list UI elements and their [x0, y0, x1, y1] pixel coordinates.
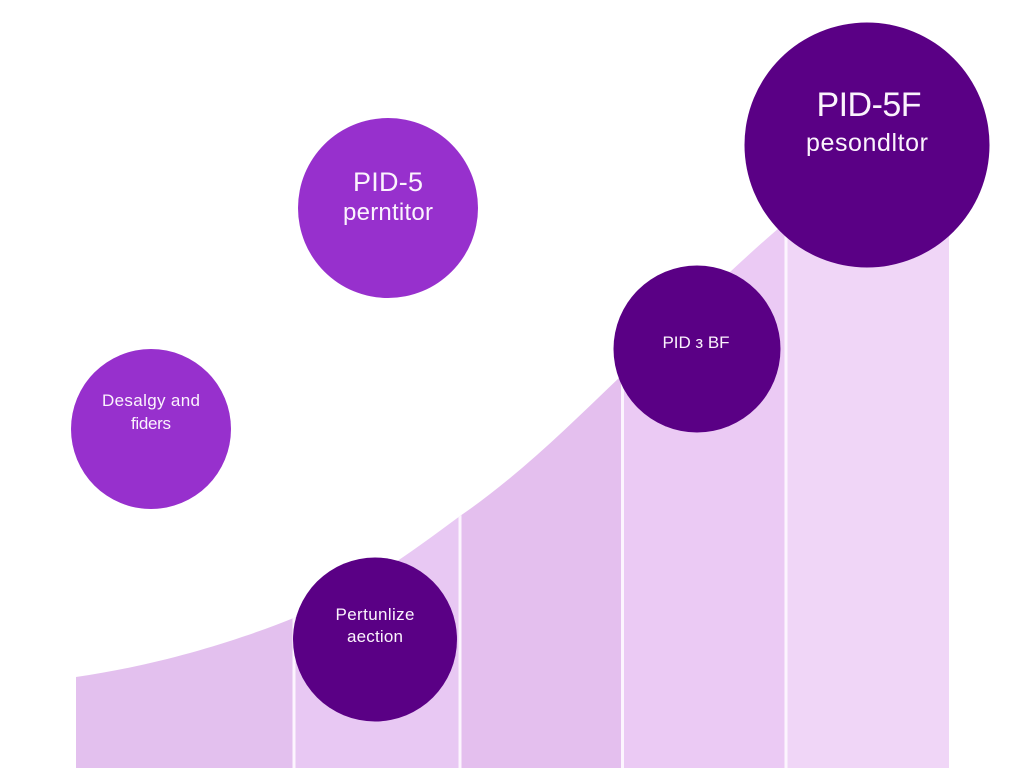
circle: Desalgy and fiders: fiders [131, 414, 171, 433]
column 4 [622, 200, 786, 768]
circle: PID-5F pesondltor [744, 22, 990, 268]
circle: PID 3 BF [614, 266, 780, 432]
circle: Desalgy and fiders [71, 349, 231, 509]
circle: PID-5F pesondltor: PID-5F [816, 86, 922, 124]
circle: PID-5 perntitor: PID-5 [353, 167, 423, 197]
circle: PID-5 perntitor [298, 118, 478, 298]
circle: Pertunlize action [293, 558, 457, 722]
column 5 [786, 200, 949, 768]
column 2 [294, 516, 460, 768]
circle: PID-5 perntitor: perntitor [343, 199, 433, 226]
circle: PID 3 BF: PID з BF [662, 333, 730, 352]
circle: Pertunlize action: aection [347, 627, 403, 646]
column 3 [460, 378, 621, 768]
column 1 [76, 618, 294, 768]
circle: PID-5F pesondltor: pesondltor [806, 129, 928, 157]
area chart [76, 200, 949, 768]
circle: Desalgy and fiders: Desalgy and [102, 391, 200, 410]
circle: Pertunlize action: Pertunlize [336, 605, 414, 624]
